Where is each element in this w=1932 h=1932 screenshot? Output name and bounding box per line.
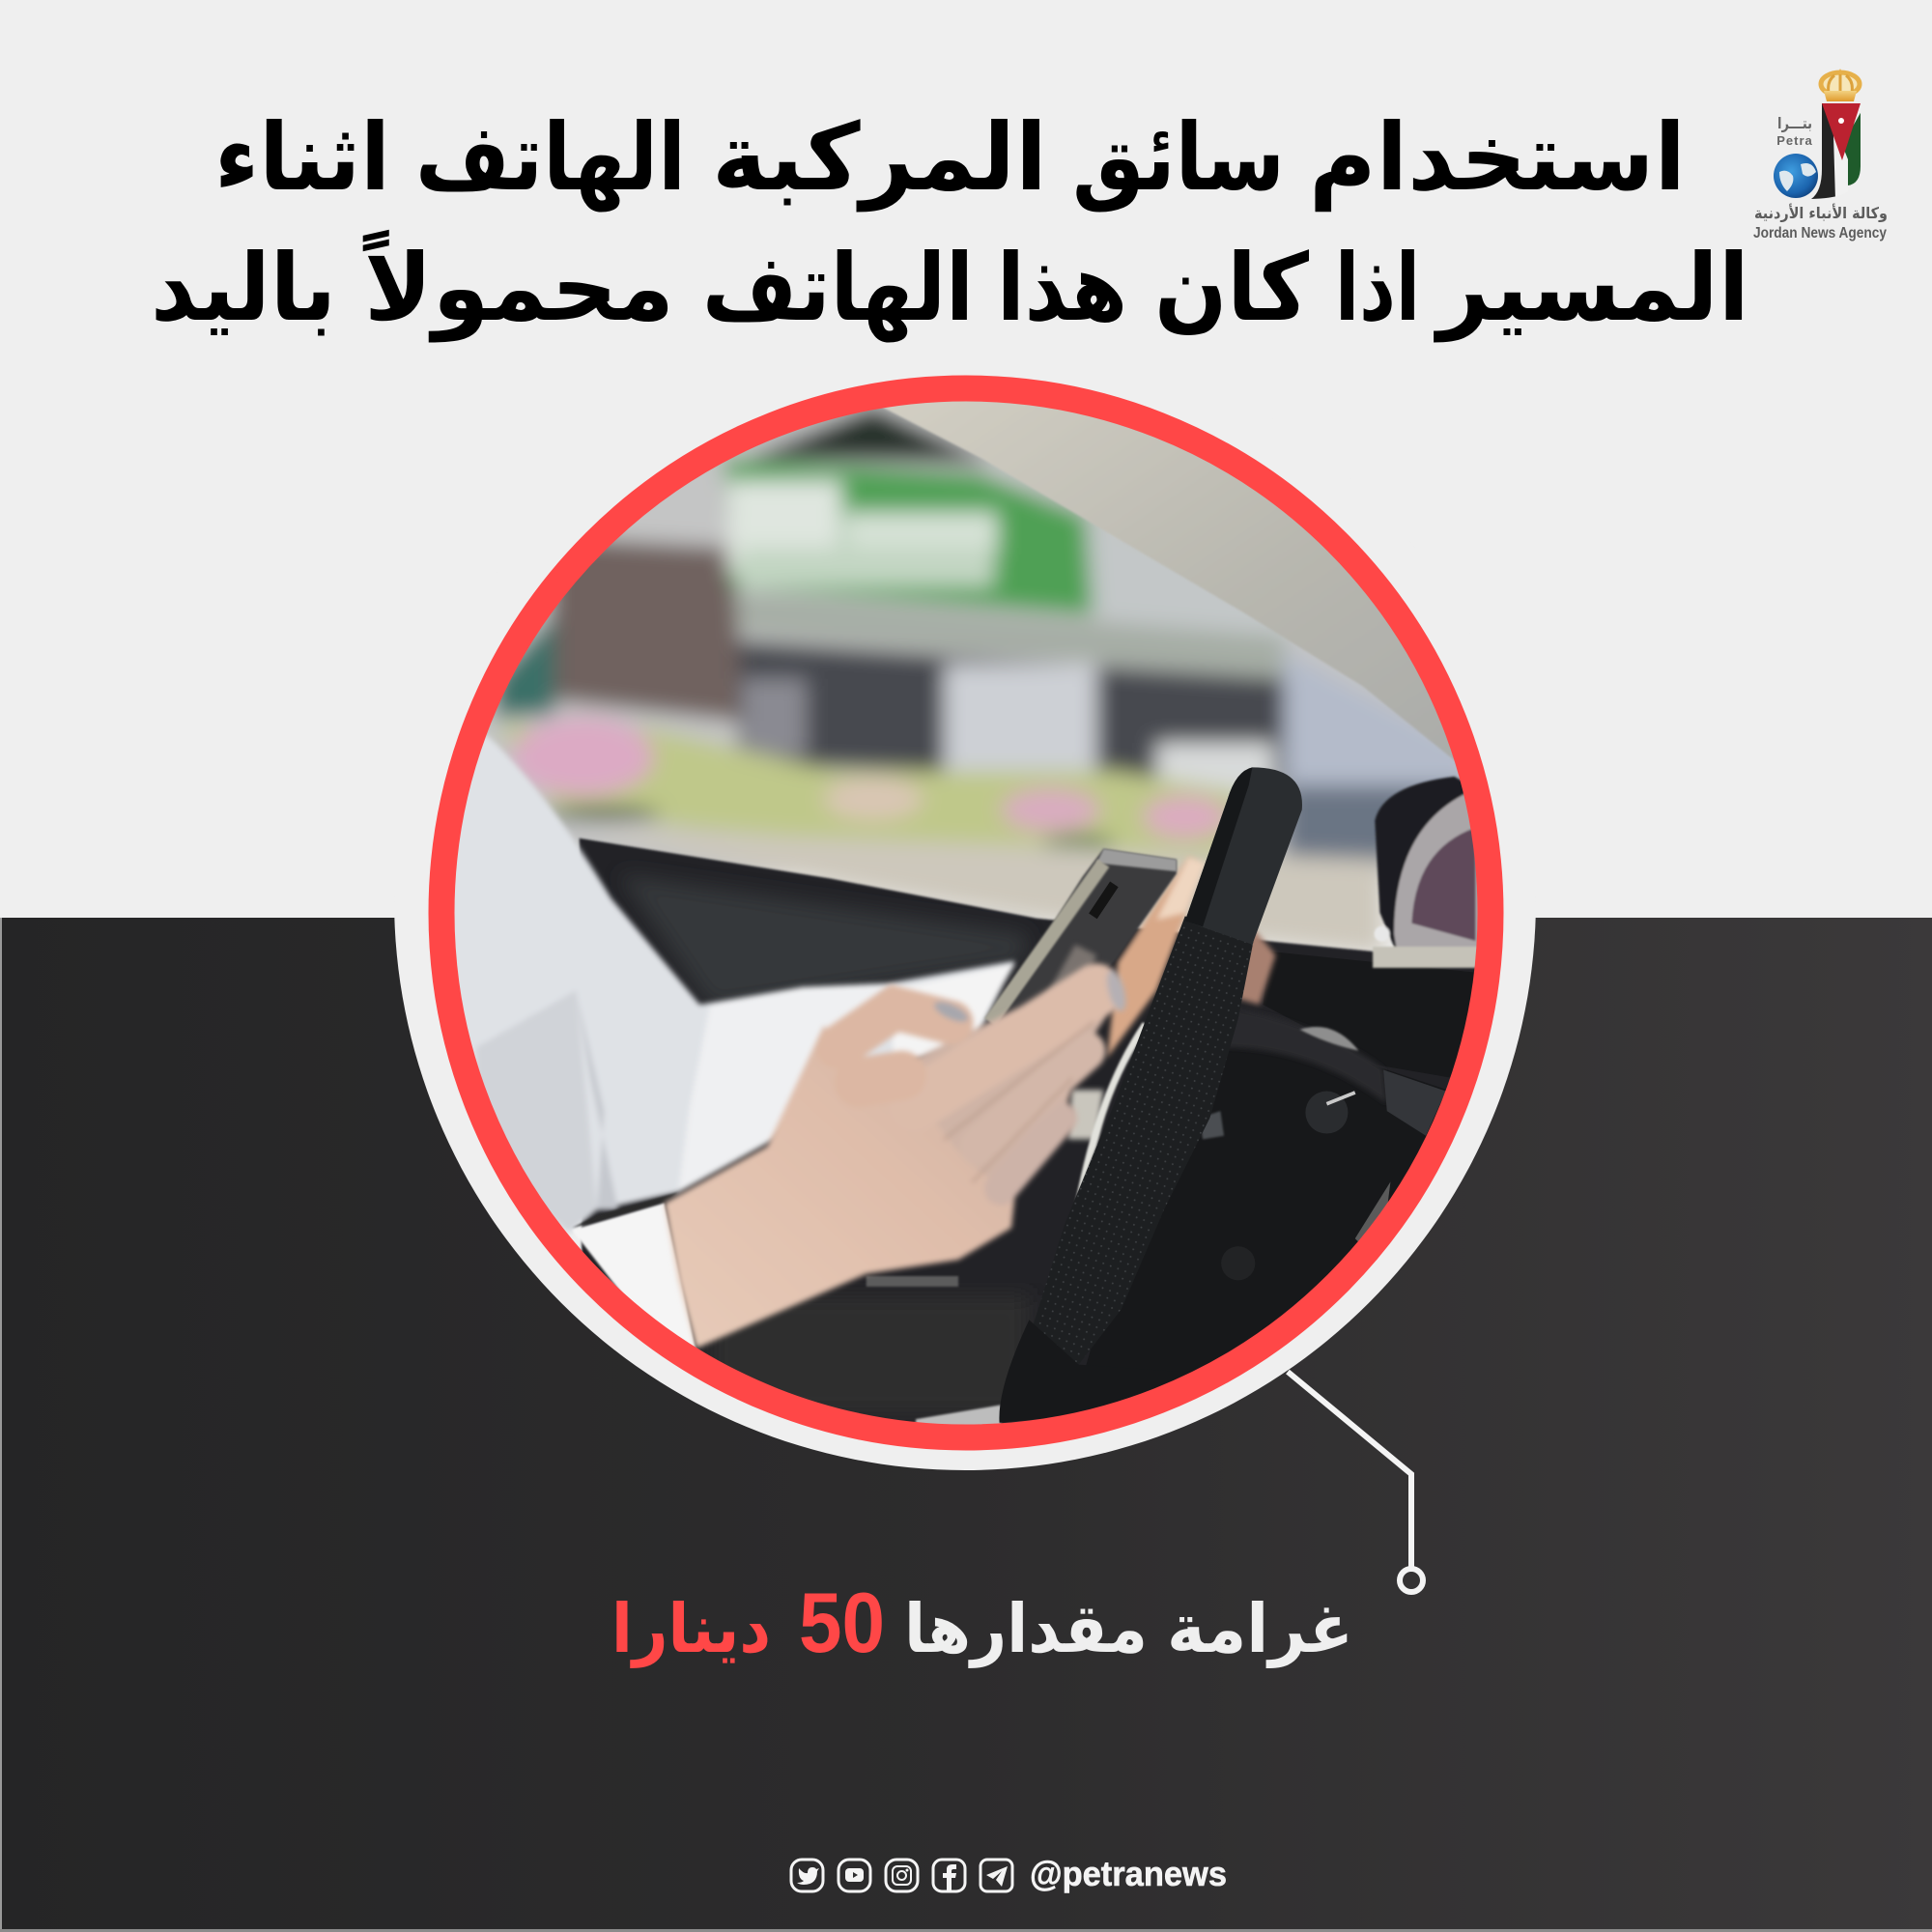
hand on phone xyxy=(665,966,1129,1349)
title line 1: اثناء xyxy=(214,103,390,212)
logo: Petra Jordan News Agency xyxy=(1753,69,1888,242)
far hand behind phone xyxy=(1068,856,1276,1139)
icon: instagram xyxy=(886,1860,918,1891)
footer social handles xyxy=(791,1854,1227,1893)
logo text: Jordan News Agency: Jordan News Agency xyxy=(1753,225,1887,242)
icon: globe xyxy=(1774,154,1818,198)
red ring around the photo xyxy=(441,388,1491,1437)
title line 2: المسير xyxy=(1434,234,1749,342)
background: light upper half xyxy=(0,0,1932,918)
title line 2: الهاتف xyxy=(702,234,974,343)
dashboard xyxy=(580,838,1483,1444)
icon: telegram xyxy=(980,1860,1012,1891)
white shirt xyxy=(448,735,1015,1235)
title xyxy=(151,103,1749,343)
shirt cuff xyxy=(572,1192,696,1350)
blurred street scene xyxy=(485,408,1461,952)
logo text: agency Arabic: وكالة الأنباء الأردنية xyxy=(1754,204,1888,222)
fine label: amount of the fine: غرامة xyxy=(1167,1589,1353,1668)
title line 1: استخدام xyxy=(1309,103,1686,213)
title line 1 xyxy=(214,103,1686,213)
handle text: @petranews xyxy=(1030,1854,1227,1893)
photo: driver using phone at the wheel xyxy=(454,402,1478,1424)
title line 2: محمولاً xyxy=(362,229,674,343)
title line 1: الهاتف xyxy=(415,103,686,213)
title line 2: باليد xyxy=(151,234,336,342)
steering wheel hub xyxy=(1075,1009,1447,1377)
fine label: amount of the fine: مقدارها xyxy=(904,1589,1148,1668)
title line 2: هذا xyxy=(997,234,1127,342)
light ring behind the photo xyxy=(394,328,1536,1470)
logo text: Petra: Petra xyxy=(1776,133,1813,148)
side mirror xyxy=(1373,777,1483,968)
title line 1: المركبة xyxy=(712,103,1047,212)
smartphone xyxy=(983,849,1177,1033)
background: dark lower half xyxy=(0,918,1932,1932)
icon: crown xyxy=(1821,69,1860,101)
icon: facebook xyxy=(933,1860,965,1891)
fine number 50: 50 xyxy=(799,1575,885,1670)
title line 2: كان xyxy=(1154,234,1309,342)
title line 2: اذا xyxy=(1335,234,1420,342)
steering wheel rim xyxy=(999,767,1302,1423)
connector line with circle marker xyxy=(1288,1372,1423,1592)
title line 1: سائق xyxy=(1072,103,1285,213)
fine text xyxy=(611,1575,1353,1670)
fine label: amount of the fine xyxy=(904,1589,1353,1668)
fine unit: dinars: دينارا xyxy=(611,1589,771,1668)
icon: Jordan flag shaped as J xyxy=(1807,103,1861,200)
car roof pillar xyxy=(883,402,1455,761)
icon: youtube xyxy=(838,1860,870,1891)
logo text: Petra Arabic: بتـــرا xyxy=(1777,114,1812,132)
icon: twitter xyxy=(791,1860,823,1891)
title line 2 xyxy=(151,229,1749,343)
